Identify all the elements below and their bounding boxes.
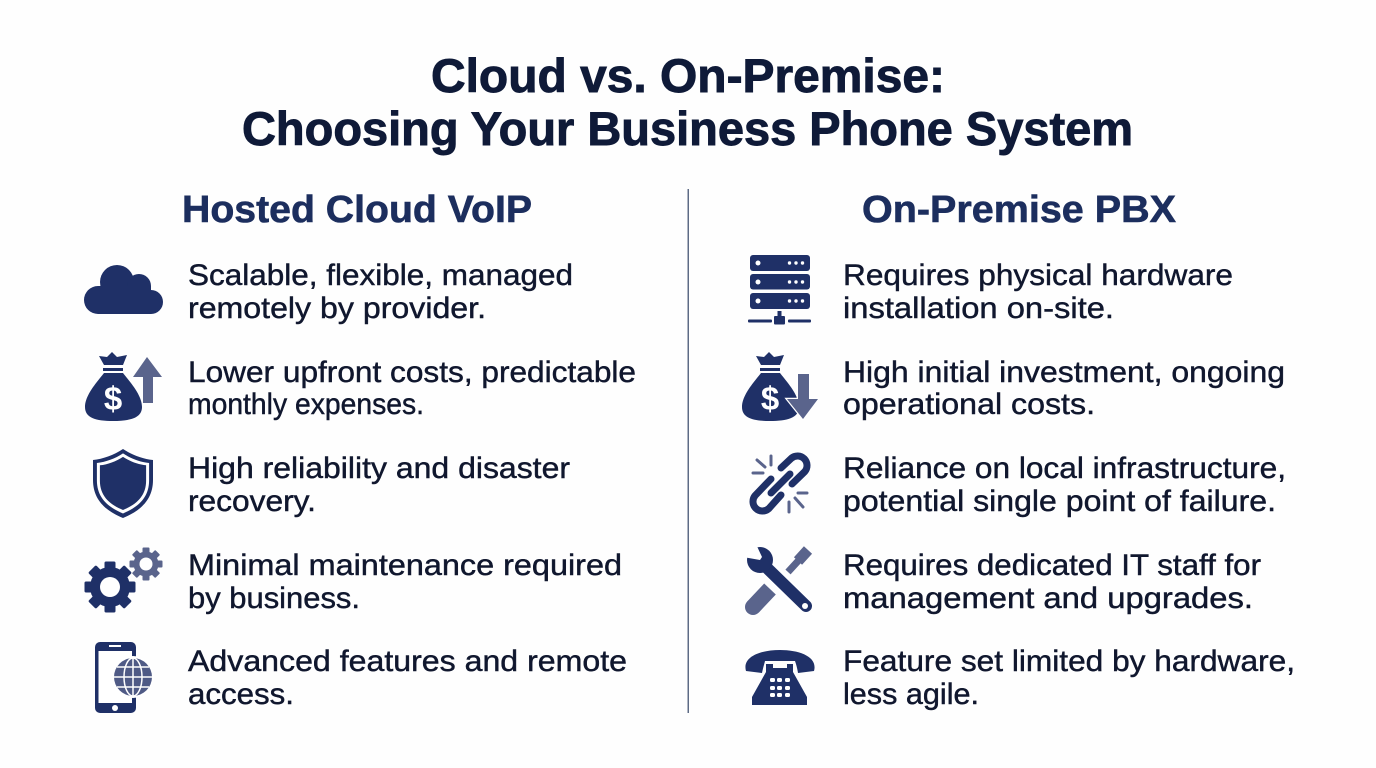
icon: money bag with up arrow: $: [104, 380, 122, 417]
panel: Hosted Cloud VoIP: [84, 189, 636, 713]
text: IT staff: Requires dedicated IT staff for: [843, 549, 1261, 582]
title: [242, 49, 1133, 155]
text: maintenance: Minimal maintenance required: [188, 549, 622, 582]
text: features: access.: [188, 678, 294, 711]
text: scalable: [188, 259, 573, 325]
text: maintenance: by business.: [188, 582, 360, 615]
icon: smartphone with globe: [95, 642, 154, 713]
text: features: Advanced features and remote: [188, 645, 627, 678]
text: costs: [188, 356, 636, 421]
text: reliability: High reliability and disaster: [188, 452, 570, 485]
text: feature set: Feature set limited by hardware,: [843, 645, 1295, 678]
icon: broken chain link: [753, 456, 807, 512]
text: infrastructure: Reliance on local infrastructure,: [843, 452, 1286, 485]
text: hardware: [843, 259, 1233, 325]
icon: shield: [93, 449, 153, 518]
text: reliability: [188, 452, 570, 518]
icon: money bag with up arrow: [85, 352, 162, 421]
panel: On-Premise PBX: [742, 189, 1295, 711]
text: IT staff: [843, 549, 1261, 615]
text: scalable: Scalable, flexible, managed: [188, 259, 573, 292]
heading: On-Premise PBX: On-Premise PBX: [862, 189, 1177, 231]
text: feature set: less agile.: [843, 678, 979, 711]
icon: desk telephone: [745, 650, 815, 705]
text: scalable: remotely by provider.: [188, 292, 486, 325]
icon: cloud: [84, 265, 163, 314]
text: costs: monthly expenses.: [188, 388, 424, 421]
title: Choosing Your Business Phone System: [242, 102, 1133, 155]
icon: money bag with down arrow: [742, 352, 818, 421]
text: IT staff: management and upgrades.: [843, 582, 1253, 615]
title: Cloud vs. On-Premise:: [431, 49, 945, 102]
icon: server rack: [748, 255, 811, 324]
text: hardware: installation on-site.: [843, 292, 1114, 325]
text: infrastructure: [843, 452, 1286, 518]
text: maintenance: [188, 549, 622, 615]
text: infrastructure: potential single point of failure.: [843, 485, 1276, 518]
icon: gears: [84, 548, 162, 612]
text: reliability: recovery.: [188, 485, 316, 518]
icon: money bag with down arrow: $: [761, 380, 779, 417]
text: feature set: [843, 645, 1295, 711]
text: costs: Lower upfront costs, predictable: [188, 356, 636, 389]
icon: wrench and screwdriver: [743, 542, 808, 615]
text: investment: operational costs.: [843, 388, 1095, 421]
text: investment: High initial investment, ongoing: [843, 356, 1285, 389]
heading: Hosted Cloud VoIP: Hosted Cloud VoIP: [182, 189, 532, 231]
text: investment: [843, 356, 1285, 421]
text: hardware: Requires physical hardware: [843, 259, 1233, 292]
text: features: [188, 645, 627, 711]
